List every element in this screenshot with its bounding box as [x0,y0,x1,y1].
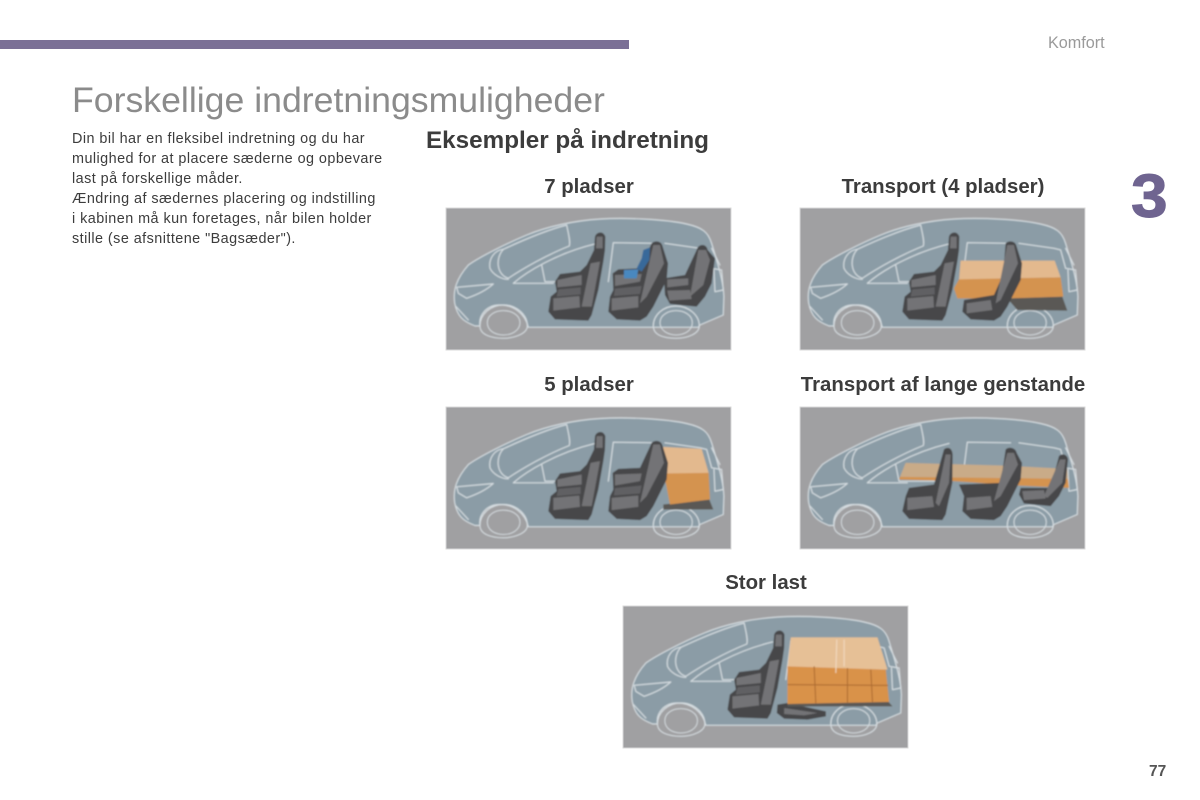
intro text: stille (se afsnittene "Bagsæder"). [72,231,296,247]
label: 7 pladser: 7 pladser [544,176,634,198]
panel: stor last [623,606,908,748]
page number: 77 [1149,763,1166,780]
intro text: Din bil har en fleksibel indretning og du har [72,131,365,147]
intro text: mulighed for at placere sæderne og opbevare [72,151,383,167]
label: 5 pladser: 5 pladser [544,374,634,396]
intro text: Ændring af sædernes placering og indstilling [72,191,376,207]
panel: 5 pladser [446,407,731,549]
intro text: last på forskellige måder. [72,171,243,187]
intro text: i kabinen må kun foretages, når bilen holder [72,211,372,227]
panel: 7 pladser [446,208,731,350]
chapter number: 3 [1131,162,1168,230]
car with long load [808,418,1078,538]
panel: transport 4 pladser [800,208,1085,350]
heading: Eksempler på indretning [426,127,709,154]
label: stor last: Stor last [725,572,807,594]
car with seven seats [454,218,724,338]
intro text [72,131,383,247]
car with rear load [454,418,724,538]
label: transport af lange genstande: Transport af lange genstande [801,374,1085,396]
car with load floor [808,218,1078,338]
top bar [0,40,629,49]
title: Forskellige indretningsmuligheder [72,80,605,120]
car with large load [632,616,901,736]
label: transport 4 pladser: Transport (4 pladser) [842,176,1044,198]
panel: transport af lange genstande [800,407,1085,549]
section name: Komfort [1048,34,1105,52]
